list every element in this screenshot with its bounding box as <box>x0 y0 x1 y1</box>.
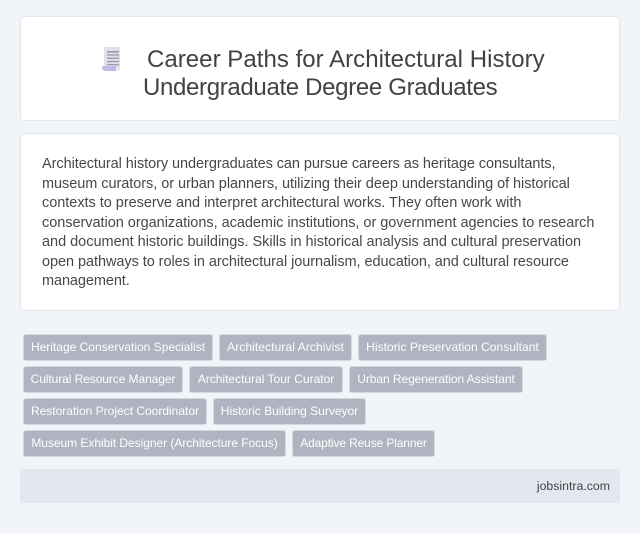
tag <box>189 366 343 393</box>
text block: description: management. <box>42 273 130 289</box>
tag: Urban Regeneration Assistant <box>357 372 515 386</box>
tag <box>23 366 183 393</box>
panel: description card <box>20 133 620 311</box>
panel: title card <box>20 16 620 121</box>
tag <box>292 430 435 457</box>
tag: Heritage Conservation Specialist <box>31 340 205 354</box>
tag <box>213 398 366 425</box>
tag: Historic Building Surveyor <box>221 404 358 418</box>
icon: document scroll <box>102 47 120 71</box>
title <box>143 46 545 101</box>
tag <box>23 334 213 361</box>
footer bar <box>20 469 620 503</box>
title: Career Paths for Architectural History <box>147 46 545 73</box>
tag: Architectural Archivist <box>227 340 344 354</box>
footer text: jobsintra.com <box>537 479 610 493</box>
tag <box>219 334 352 361</box>
text block: description: Architectural history undergraduates can pursue careers as heritage consultants, <box>42 156 555 172</box>
text block: description <box>42 156 594 289</box>
tag: Adaptive Reuse Planner <box>300 436 427 450</box>
text block: description: and document historic buildings. Skills in historical analysis and cultural preservation <box>42 234 581 250</box>
tag: Cultural Resource Manager <box>31 372 175 386</box>
tag: Architectural Tour Curator <box>198 372 334 386</box>
tag: Restoration Project Coordinator <box>31 404 199 418</box>
tag: Museum Exhibit Designer (Architecture Focus) <box>31 436 278 450</box>
text block: description: museum curators, or urban planners, utilizing their deep understanding of historical <box>42 176 570 192</box>
tag: Historic Preservation Consultant <box>366 340 539 354</box>
tag list: career paths <box>23 334 547 457</box>
tag <box>23 398 207 425</box>
text block: description: contexts to preserve and interpret architectural works. They often work with <box>42 195 521 211</box>
text block: description: open pathways to roles in architectural journalism, education, and cultural resource <box>42 254 569 270</box>
tag <box>358 334 547 361</box>
tag <box>23 430 286 457</box>
tag <box>349 366 523 393</box>
title: Undergraduate Degree Graduates <box>143 74 497 101</box>
text block: description: conservation organizations, academic institutions, or government agencies to research <box>42 215 594 231</box>
